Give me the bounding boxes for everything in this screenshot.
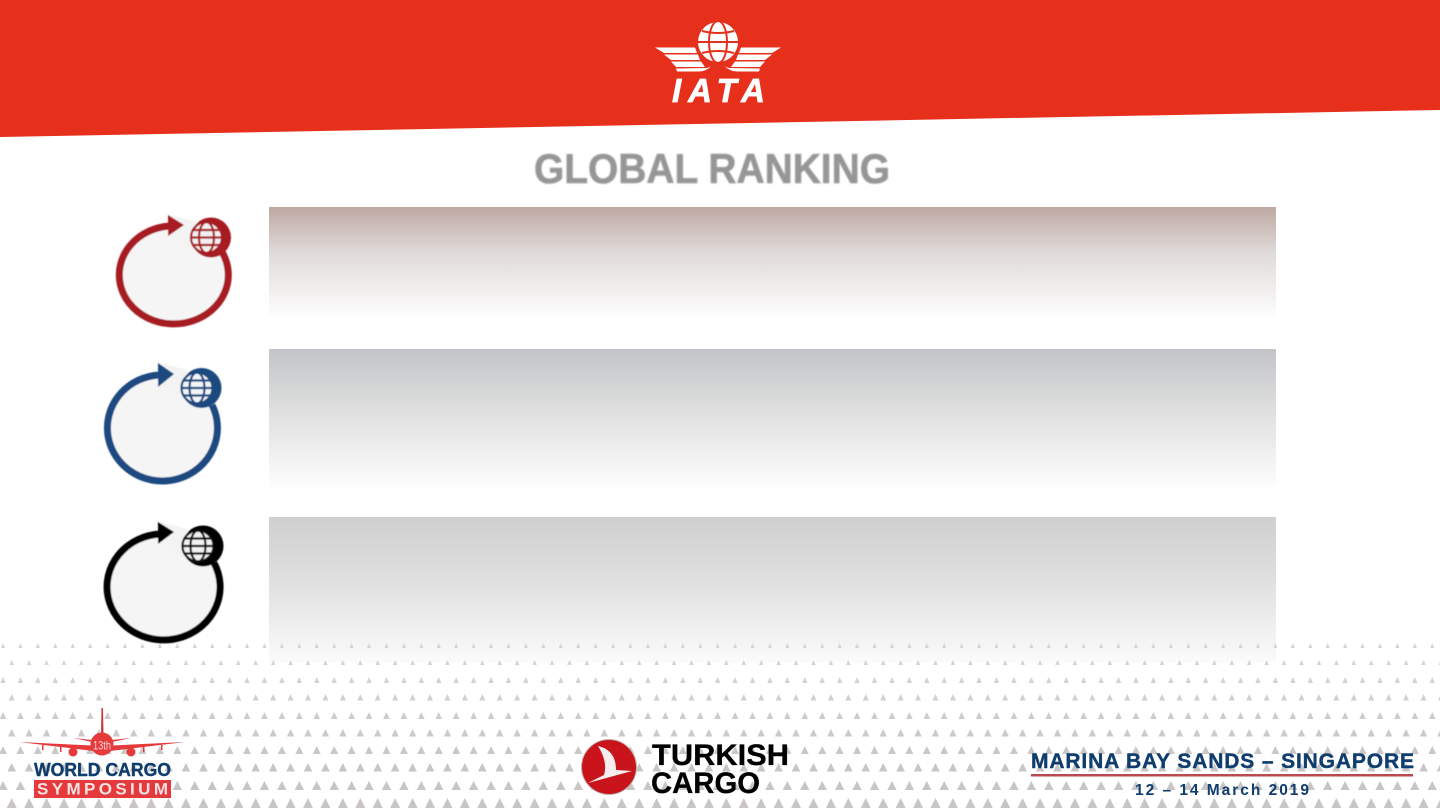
panel: ranking row 1 (269, 207, 1276, 320)
text: Cargo: CARGO (651, 767, 760, 800)
icon: airplane: 13th (93, 738, 111, 752)
badge: Symposium (34, 780, 171, 798)
icon: Turkish Airlines emblem (582, 740, 636, 794)
event date: 12 – 14 March 2019 (1135, 782, 1309, 799)
panel: ranking row 2 (269, 349, 1276, 492)
icon: IATA wings (655, 48, 781, 72)
divider under location (1031, 774, 1413, 776)
triangle pattern background (0, 643, 1440, 810)
icon: black globe ring (107, 522, 224, 640)
icon: airplane (19, 708, 185, 756)
icon: blue globe ring (107, 363, 222, 481)
logo: Turkish Cargo (582, 739, 789, 800)
icon: IATA globe (697, 21, 739, 63)
event location: MARINA BAY SANDS – SINGAPORE (1031, 750, 1414, 773)
title: GLOBAL RANKING (534, 145, 890, 192)
icon: IATA logo (655, 21, 781, 109)
panel: ranking row 3 (269, 517, 1276, 663)
icon: red globe ring (119, 215, 231, 324)
IATA wordmark: IATA (672, 72, 765, 109)
text: Turkish: TURKISH (652, 739, 789, 772)
logo: World Cargo Symposium: SYMPOSIUM (37, 780, 168, 798)
logo: World Cargo Symposium (19, 708, 185, 798)
header red banner (0, 0, 1440, 137)
text: World Cargo: WORLD CARGO (34, 759, 171, 780)
